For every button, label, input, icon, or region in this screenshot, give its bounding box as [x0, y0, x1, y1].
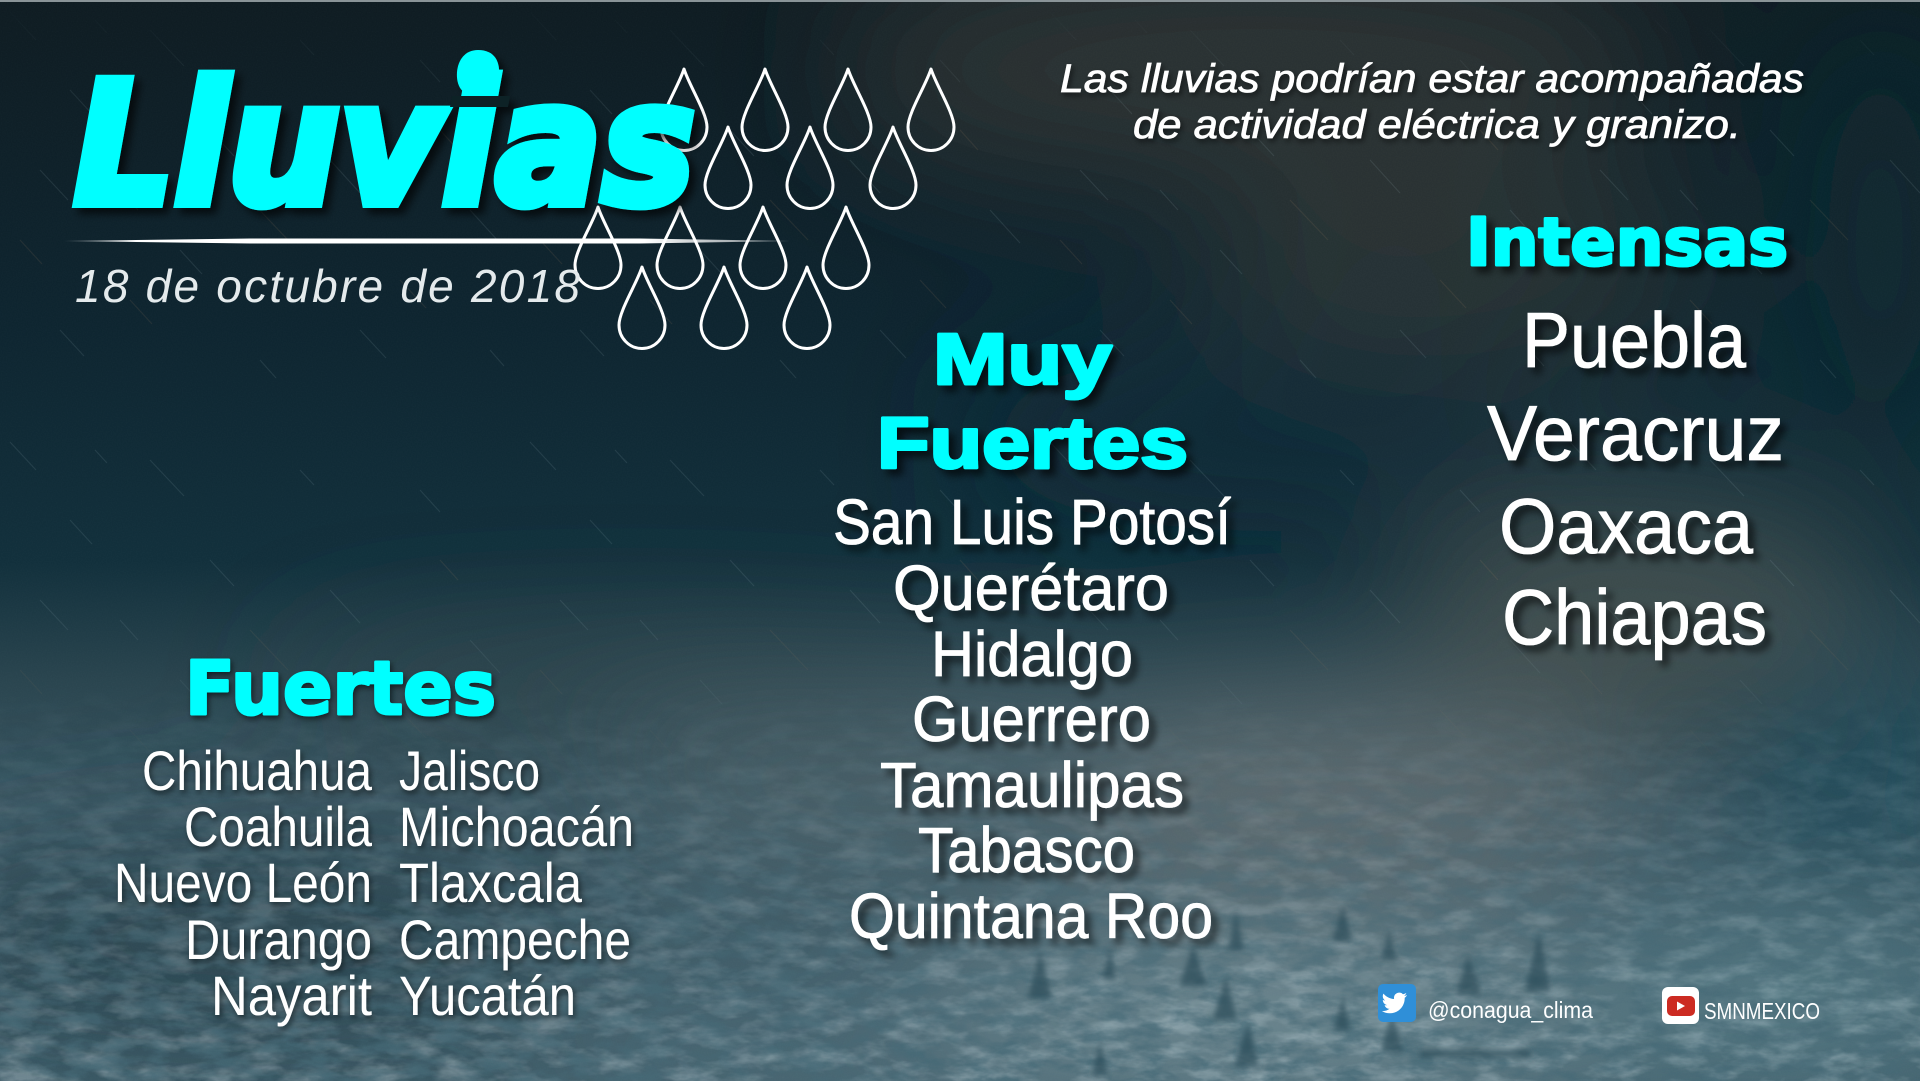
list: strong rain states, left column: Chihuahua [142, 739, 373, 802]
list: very strong rain states [833, 486, 1231, 952]
list: strong rain states, left column: Nayarit [211, 964, 372, 1027]
list: very strong rain states: Tabasco [918, 814, 1135, 886]
list: intense rain states: Oaxaca [1499, 482, 1754, 570]
list: very strong rain states: Tamaulipas [880, 749, 1184, 821]
list: very strong rain states: San Luis Potosí [833, 486, 1231, 558]
heading: Intensas: Intensas [1466, 204, 1788, 281]
note: electrical activity and hail: Las lluvias podrían estar acompañadas [1060, 57, 1804, 101]
list: intense rain states [1487, 296, 1784, 661]
list: very strong rain states: Querétaro [893, 552, 1169, 624]
list: strong rain states, left column: Coahuila [184, 795, 373, 858]
list: very strong rain states: Guerrero [912, 683, 1151, 755]
heading: Muy Fuertes: Fuertes [877, 404, 1188, 484]
list: intense rain states: Puebla [1522, 296, 1747, 384]
panel: Muy Fuertes [833, 320, 1231, 952]
note: electrical activity and hail [1060, 57, 1804, 147]
panel: Intensas [1466, 204, 1788, 661]
label: Twitter handle: @conagua_clima [1428, 997, 1593, 1023]
list: strong rain states, right column: Michoacán [399, 795, 634, 858]
title: Lluvias [74, 46, 695, 243]
list: intense rain states: Veracruz [1487, 389, 1784, 477]
heading: Muy Fuertes: Muy [933, 320, 1112, 400]
list: strong rain states, right column: Jalisco [399, 739, 540, 802]
list: very strong rain states: Quintana Roo [849, 880, 1213, 952]
list: strong rain states, left column: Durango [185, 908, 372, 971]
list: intense rain states: Chiapas [1502, 573, 1767, 661]
icon: raindrops cluster [575, 69, 954, 348]
list: strong rain states, right column: Yucatán [399, 964, 576, 1027]
list: strong rain states, right column [399, 739, 634, 1027]
icon: Twitter bird [1378, 984, 1416, 1022]
heading: Fuertes: Fuertes [185, 646, 496, 732]
list: strong rain states, left column [114, 739, 373, 1027]
icon: YouTube logo [1662, 987, 1699, 1024]
label: YouTube channel: SMNMEXICO [1704, 998, 1820, 1024]
divider line under title [64, 238, 790, 244]
panel: Fuertes [114, 646, 634, 1027]
social: Twitter [1378, 984, 1593, 1023]
list: strong rain states, left column: Nuevo León [114, 851, 372, 914]
list: very strong rain states: Hidalgo [931, 618, 1133, 690]
social: YouTube [1662, 987, 1820, 1024]
date: 18 de octubre de 2018 [75, 260, 580, 312]
list: strong rain states, right column: Campeche [399, 908, 631, 971]
list: strong rain states, right column: Tlaxcala [399, 851, 583, 914]
heading: Muy Fuertes [877, 320, 1188, 484]
note: electrical activity and hail: de actividad eléctrica y granizo. [1133, 103, 1741, 147]
